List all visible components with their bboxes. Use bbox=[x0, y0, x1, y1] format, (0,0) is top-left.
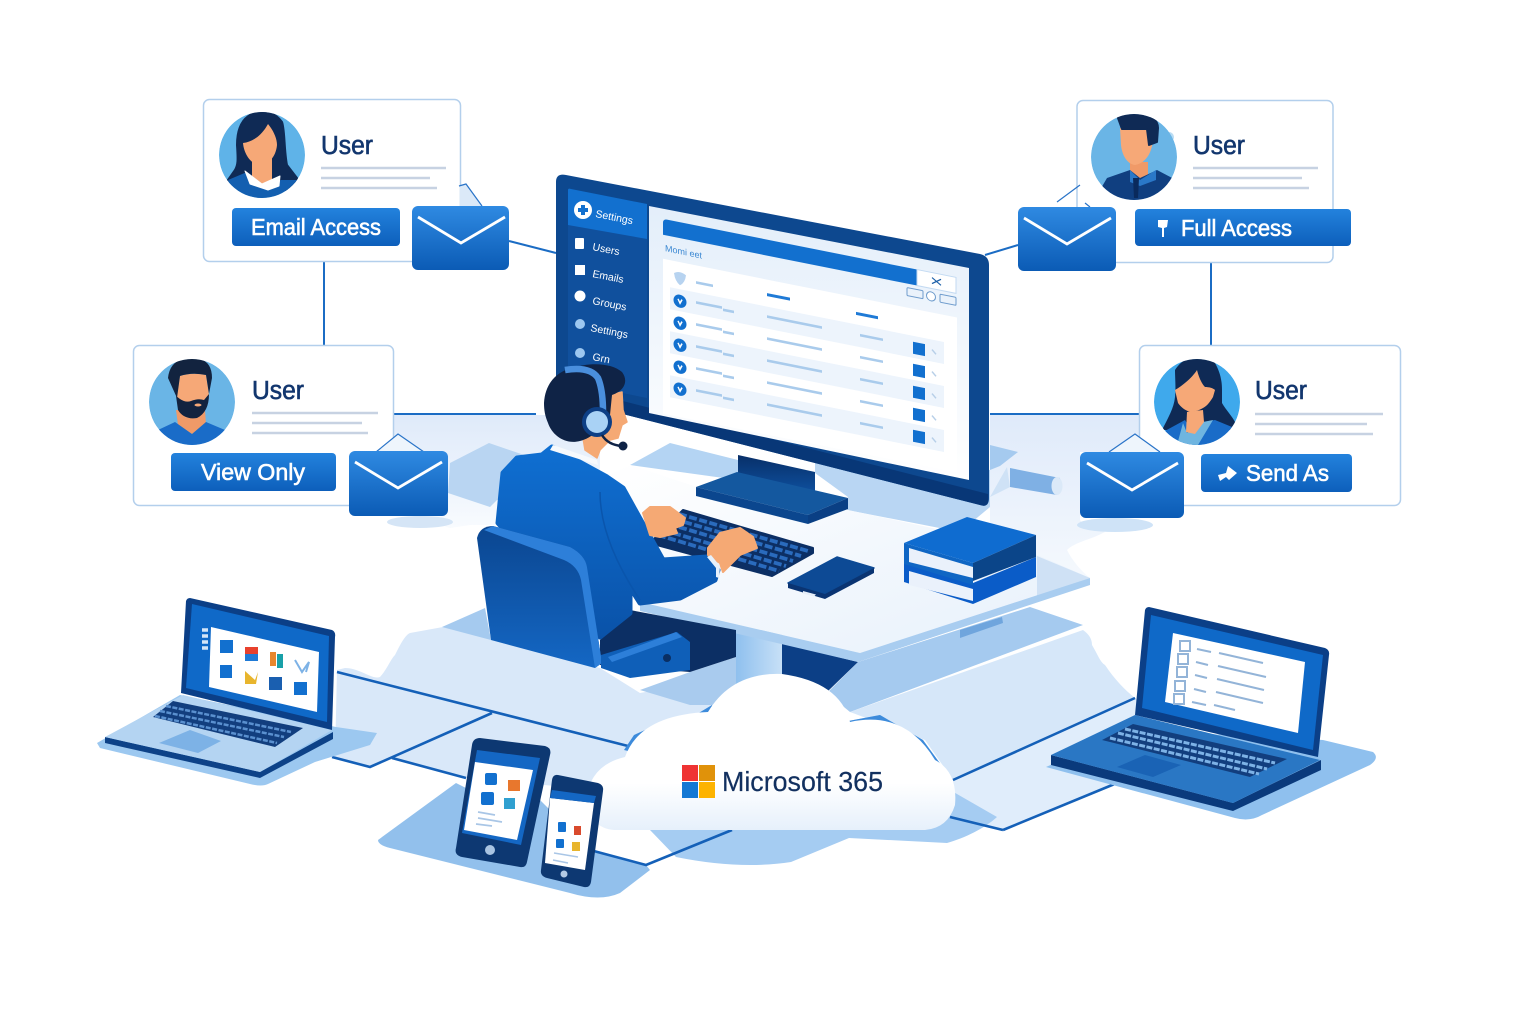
phones shadow bbox=[378, 783, 650, 898]
badge bbox=[1135, 209, 1351, 246]
monitor bbox=[556, 175, 989, 524]
keyboard bbox=[1102, 724, 1287, 777]
lid bbox=[181, 598, 335, 730]
sidebar bbox=[568, 189, 647, 398]
screen bbox=[649, 206, 969, 480]
envelope: View Only bbox=[349, 434, 448, 516]
illustration: Microsoft 365 mailbox access administration bbox=[97, 98, 1402, 898]
shadow bbox=[1046, 730, 1376, 819]
detail lines bbox=[321, 168, 446, 188]
avatar: woman bbox=[219, 112, 305, 200]
sidebar items: Settings bbox=[594, 208, 634, 227]
floor platform bbox=[335, 415, 1160, 830]
app icons bbox=[220, 640, 309, 695]
card: Full Access user bbox=[1077, 100, 1351, 262]
sidebar items: Groups bbox=[591, 295, 628, 314]
logo: Microsoft squares bbox=[682, 765, 715, 798]
detail lines bbox=[1255, 414, 1383, 434]
trackpad bbox=[159, 730, 221, 753]
avatar: bearded man bbox=[149, 358, 235, 450]
desk top bbox=[608, 465, 1090, 653]
badge bbox=[1201, 454, 1352, 492]
avatar: woman with dark hair bbox=[1154, 357, 1240, 450]
envelope: Send As bbox=[1077, 434, 1184, 532]
monitor stand bbox=[738, 455, 815, 492]
trackpad bbox=[1117, 755, 1181, 777]
phones bbox=[456, 738, 603, 887]
badge: Full Access bbox=[1181, 215, 1292, 241]
connector lines bbox=[324, 241, 1211, 830]
floor lines over shadow bbox=[590, 817, 1003, 865]
envelope: Email Access bbox=[412, 184, 509, 270]
jacket bbox=[498, 447, 718, 637]
books bbox=[904, 517, 1036, 604]
operator at desk bbox=[477, 364, 757, 678]
card: Email Access user bbox=[204, 100, 460, 262]
envelope: Full Access bbox=[1018, 185, 1116, 271]
small desk cylinder bbox=[1010, 468, 1062, 495]
lid bbox=[1135, 607, 1329, 757]
desk legs bbox=[736, 630, 782, 690]
keyboard bbox=[153, 701, 303, 747]
base bbox=[1051, 755, 1321, 811]
name: User bbox=[252, 377, 304, 405]
laptop: left bbox=[97, 598, 377, 786]
detail lines bbox=[252, 413, 378, 433]
icon: send arrow bbox=[1218, 466, 1237, 481]
trousers bbox=[600, 610, 736, 672]
keyboard on desk bbox=[653, 510, 813, 576]
tablet on desk bbox=[788, 557, 874, 599]
headset bbox=[565, 369, 603, 412]
badge: Email Access bbox=[251, 214, 381, 240]
phone: large bbox=[456, 738, 550, 867]
cloud shadow bbox=[640, 715, 997, 865]
checklist bbox=[1174, 641, 1266, 710]
name: User bbox=[1255, 377, 1307, 405]
head bbox=[583, 392, 627, 458]
card: Send As user bbox=[1140, 346, 1400, 506]
chair bbox=[477, 526, 602, 668]
base bbox=[105, 732, 333, 778]
badge bbox=[171, 453, 336, 491]
sidebar items bbox=[574, 201, 634, 366]
monitor frame bbox=[556, 175, 989, 506]
name: User bbox=[321, 132, 373, 160]
upper book bbox=[904, 543, 973, 585]
monitor and desk shadows bbox=[630, 440, 1018, 532]
badge: Send As bbox=[1246, 460, 1329, 486]
laptop: right bbox=[1046, 607, 1376, 819]
badge bbox=[232, 208, 400, 246]
card: View Only user bbox=[134, 346, 394, 506]
sidebar items: Emails bbox=[591, 268, 625, 286]
detail lines bbox=[1193, 168, 1318, 188]
phone: small bbox=[541, 775, 603, 887]
avatar: man with tie bbox=[1091, 112, 1177, 205]
sidebar items: Grn bbox=[591, 351, 611, 366]
screen content: Momi eet bbox=[665, 243, 702, 261]
lower book bbox=[904, 557, 1036, 604]
cloud bbox=[586, 674, 1003, 865]
icon: pin bbox=[1158, 220, 1168, 237]
hands bbox=[643, 507, 685, 537]
name: User bbox=[1193, 132, 1245, 160]
sidebar dots bbox=[202, 630, 208, 648]
sidebar items: Users bbox=[591, 241, 621, 258]
desk bbox=[608, 465, 1090, 692]
badge: View Only bbox=[201, 459, 305, 485]
shadow bbox=[97, 695, 377, 786]
sidebar items: Settings bbox=[589, 322, 629, 341]
cloud body bbox=[586, 674, 955, 830]
label: Microsoft 365 bbox=[722, 766, 883, 797]
screen content bbox=[663, 219, 957, 473]
